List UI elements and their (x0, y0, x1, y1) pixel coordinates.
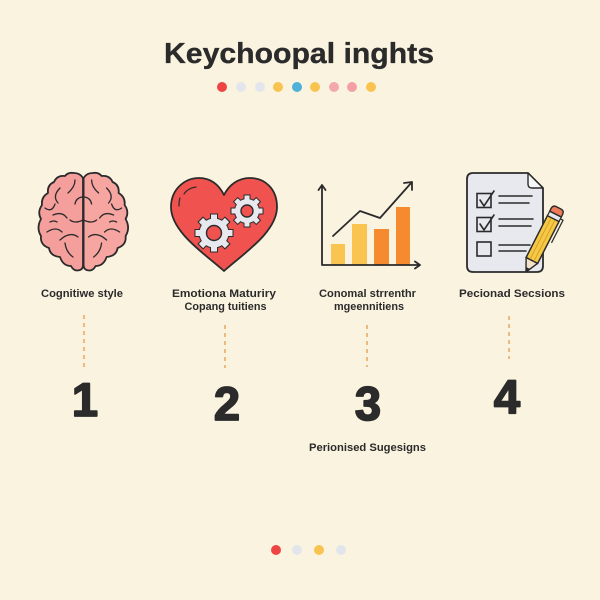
decorative title dots (217, 82, 376, 92)
label: emotional maturity (172, 288, 277, 313)
label: personal strength: mgeennitiens (334, 301, 404, 313)
connector 2 (224, 325, 226, 368)
small gear (230, 194, 264, 228)
number 2: 2 (214, 377, 240, 430)
connector 1 (83, 315, 85, 370)
connector 4 (508, 316, 510, 359)
decorative bottom dots (271, 545, 346, 555)
title: Keychoopal inghts (164, 38, 434, 70)
label: emotional maturity: Emotiona Maturiry (172, 288, 277, 300)
number 4: 4 (494, 370, 520, 423)
icon: heart with gears (171, 178, 277, 271)
icon: growth chart (318, 182, 420, 268)
label: personalised suggestions: Perionised Sugesigns (309, 442, 426, 454)
label: emotional maturity: Copang tuitiens (184, 301, 266, 313)
label: personal strength: Conomal strrenthr (319, 288, 417, 300)
label: cognitive style: Cognitiwe style (41, 288, 123, 300)
label: personal strength (319, 288, 417, 313)
label: personal sections: Pecionad Secsions (459, 288, 565, 300)
icon: checklist with pencil (467, 173, 567, 276)
number 1: 1 (72, 373, 98, 426)
connector 3 (366, 325, 368, 367)
icon: brain (38, 173, 128, 270)
number 3: 3 (355, 377, 381, 430)
big gear (194, 214, 234, 252)
